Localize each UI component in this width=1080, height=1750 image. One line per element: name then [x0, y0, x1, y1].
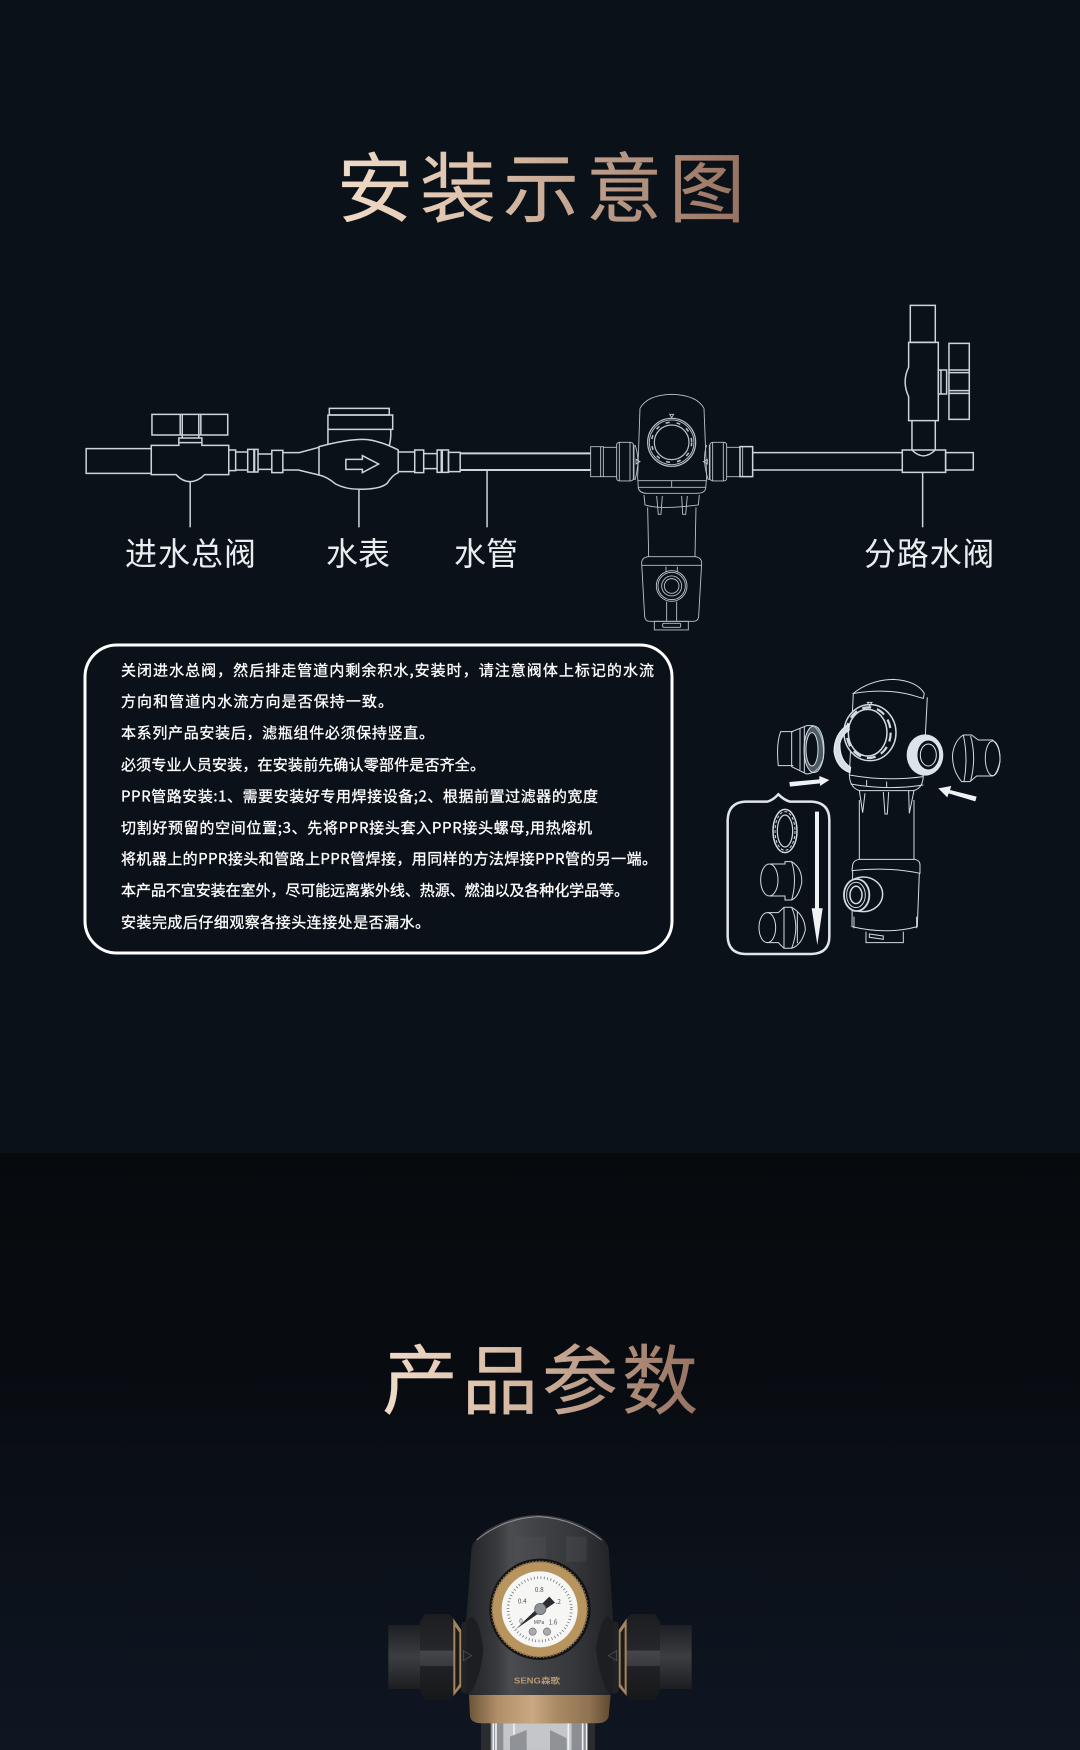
label: branch valve: 分路水阀 [864, 529, 995, 575]
gauge scale numbers: 0 [519, 1616, 523, 1625]
gauge scale numbers: 0.8 [535, 1585, 544, 1594]
background: installation section [0, 0, 1080, 1153]
transparent filter bottle [481, 1720, 595, 1750]
dome highlight [477, 1517, 602, 1540]
couplings after meter [415, 450, 460, 473]
pipe to branch valve [753, 453, 902, 470]
couplings between valve and meter [229, 447, 319, 475]
gauge scale numbers: MPa [534, 1618, 544, 1626]
notes text: 本产品不宜安装在室外，尽可能远离紫外线、热源、燃油以及各种化学品等。 [121, 880, 629, 900]
gauge scale numbers [518, 1585, 561, 1626]
label: water meter: 水表 [326, 529, 390, 575]
water pipe [460, 453, 590, 470]
arrow: left fitting direction [789, 776, 829, 787]
sealing ring [773, 809, 797, 853]
notes text: 关闭进水总阀，然后排走管道内剩余积水,安装时，请注意阀体上标记的水流 [121, 660, 654, 680]
filter line drawing [591, 394, 753, 630]
right union fitting [606, 1614, 692, 1700]
notes frame [85, 645, 672, 953]
right port ring [907, 734, 943, 776]
water meter [319, 408, 415, 489]
gauge screws [529, 1628, 551, 1635]
gauge scale numbers: 1.6 [549, 1617, 558, 1626]
water pipe leader line [486, 470, 488, 527]
right pipeline: filter and branch valve [560, 305, 973, 630]
pipeline diagram [86, 305, 973, 630]
notes text [121, 660, 657, 932]
needle hub [535, 1603, 546, 1615]
flow triangles [463, 1651, 617, 1661]
inlet main valve [86, 414, 229, 482]
branch valve [905, 305, 969, 421]
notes text: PPR管路安装:1、需要安装好专用焊接设备;2、根据前置过滤器的宽度 [121, 786, 598, 806]
background: parameter section [0, 1153, 1080, 1750]
left port ring [834, 724, 851, 773]
socket with nut [759, 907, 805, 948]
water meter leader line [358, 489, 360, 527]
black filter head [466, 1515, 613, 1695]
bottom outlet port [844, 877, 883, 912]
gauge needle [516, 1597, 555, 1629]
notes text: 切割好预留的空间位置;3、先将PPR接头套入PPR接头螺母,用热熔机 [121, 817, 592, 838]
notes text: 必须专业人员安装，在安装前先确认零部件是否齐全。 [121, 754, 485, 775]
inset down arrow [812, 812, 823, 945]
right coupling [740, 447, 753, 477]
welding socket [761, 862, 802, 900]
body side shadows [466, 1617, 613, 1693]
left union fitting [388, 1614, 473, 1700]
pressure gauge [489, 1559, 591, 1660]
gauge scale numbers: 0.4 [518, 1596, 527, 1605]
inset parts [759, 809, 805, 948]
right PPR fitting [953, 735, 1000, 782]
notes text: 本系列产品安装后，滤瓶组件必须保持竖直。 [121, 722, 434, 743]
gauge scale numbers: .2 [556, 1597, 561, 1606]
notes text: 方向和管道内水流方向是否保持一致。 [121, 690, 393, 712]
left PPR fitting [778, 726, 824, 774]
arrow: right fitting direction [938, 786, 977, 801]
branch valve tee [902, 421, 973, 472]
gauge bezel [489, 1559, 591, 1660]
inset frame: fitting parts [728, 794, 829, 954]
product photo: pre-filter with pressure gauge [388, 1515, 692, 1750]
pipe to filter [560, 453, 591, 470]
gauge face [502, 1571, 578, 1647]
notes text: 安装完成后仔细观察各接头连接处是否漏水。 [121, 912, 430, 932]
notes text: 将机器上的PPR接头和管路上PPR管焊接，用同样的方法焊接PPR管的另一端。 [121, 848, 657, 869]
inlet valve leader line [189, 482, 191, 527]
dome top sheen [514, 1537, 587, 1562]
gauge ticks [508, 1578, 571, 1641]
panel: installation notes [85, 645, 672, 953]
exploded filter diagram [728, 679, 1000, 954]
pressure dial ring [844, 702, 896, 761]
label: water pipe: 水管 [454, 529, 518, 575]
label: inlet main valve: 进水总阀 [125, 529, 257, 575]
left pipeline: inlet valve, water meter and pipe [86, 408, 590, 527]
title: product parameters: 产品参数 [382, 1320, 702, 1430]
title: installation diagram: 安装示意图 [337, 128, 752, 238]
branch valve leader line [922, 472, 924, 527]
filter body [849, 679, 927, 943]
brand mark: SENG森歌 [514, 1675, 560, 1685]
gold collar [469, 1695, 611, 1723]
